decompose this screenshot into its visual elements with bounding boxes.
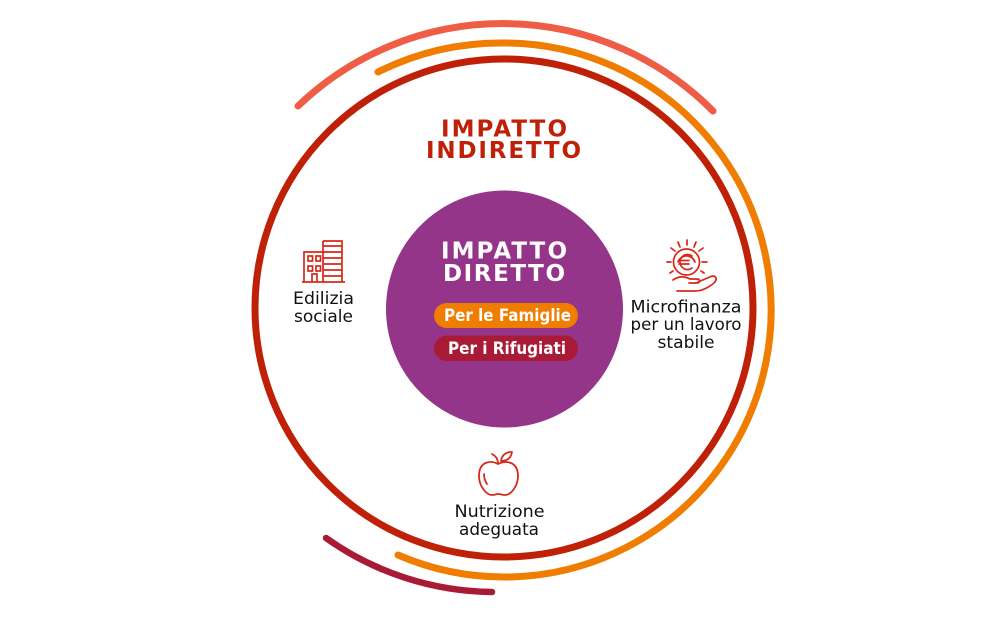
label xyxy=(630,298,742,353)
label: Microfinanza xyxy=(630,298,742,318)
label: stabile xyxy=(658,333,714,353)
label xyxy=(293,289,354,327)
panel: direct impact circle xyxy=(386,190,623,428)
label: per un lavoro xyxy=(630,315,742,335)
heading: impatto diretto: DIRETTO xyxy=(443,261,565,287)
icon: apple xyxy=(479,452,518,495)
pill: per le famiglie: Per le Famiglie xyxy=(444,306,571,326)
item: edilizia sociale xyxy=(293,241,354,327)
main ring: indirect impact xyxy=(255,59,753,557)
heading: impatto indiretto xyxy=(426,116,581,164)
heading: impatto indiretto: IMPATTO xyxy=(441,116,567,142)
heading: impatto indiretto: INDIRETTO xyxy=(426,138,581,164)
icon: buildings xyxy=(302,241,345,282)
outer arc: crimson xyxy=(326,538,492,592)
item: nutrizione adeguata xyxy=(454,452,544,540)
icon: hand with euro coin xyxy=(667,240,716,291)
label: Nutrizione xyxy=(454,502,544,522)
label: Edilizia xyxy=(293,289,354,309)
outer arc: orange xyxy=(378,43,771,577)
item: microfinanza xyxy=(630,240,742,353)
outer arc: coral xyxy=(298,24,713,111)
heading: impatto diretto: IMPATTO xyxy=(441,238,567,264)
label: adeguata xyxy=(459,520,539,540)
pill: per i rifugiati: Per i Rifugiati xyxy=(448,339,566,359)
label xyxy=(454,502,544,540)
label: sociale xyxy=(294,307,353,327)
heading: impatto diretto xyxy=(441,238,567,287)
